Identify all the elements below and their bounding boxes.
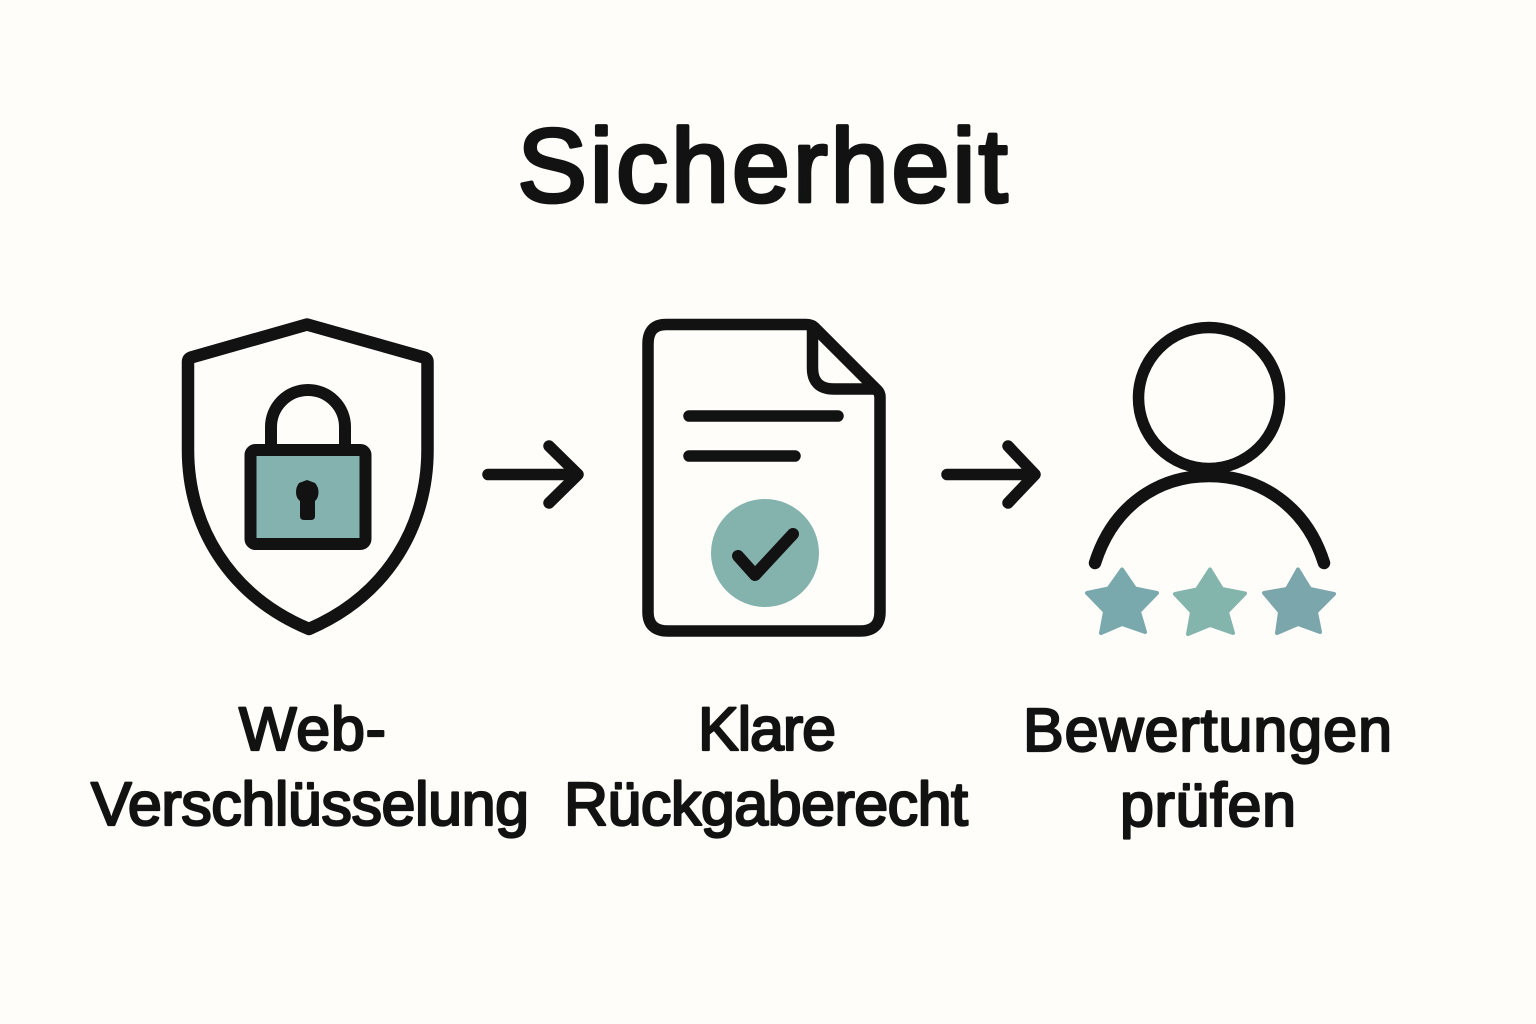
check mark [738, 534, 793, 575]
padlock shackle [271, 390, 345, 446]
panel: return policy [564, 324, 968, 838]
star 1 [1087, 570, 1157, 633]
padlock body [250, 450, 366, 544]
icon: person [1095, 328, 1324, 563]
icon: document [648, 324, 880, 631]
document folded corner [812, 326, 873, 389]
person head [1138, 328, 1280, 468]
label: Web-Verschlüsselung: Web- [239, 695, 386, 763]
arrow: shield to document [488, 446, 578, 503]
icon: shield [188, 324, 428, 629]
label: Klare Rückgaberecht: Rückgaberecht [564, 770, 968, 838]
person shoulders [1095, 476, 1324, 563]
document outline [648, 324, 880, 631]
panel: web encryption [91, 324, 529, 838]
label: Bewertungen prüfen: prüfen [1120, 771, 1296, 839]
document text lines [689, 416, 838, 456]
label: Web-Verschlüsselung [91, 695, 529, 838]
icon: padlock [250, 390, 366, 544]
star 2 [1175, 570, 1245, 634]
label: Klare Rückgaberecht [564, 695, 968, 838]
title: Sicherheit [518, 108, 1008, 224]
panel: reviews [1023, 328, 1392, 839]
star 3 [1264, 570, 1334, 633]
padlock keyhole [296, 480, 318, 520]
check badge [711, 499, 819, 607]
icon: rating stars [1087, 570, 1334, 634]
label: Klare Rückgaberecht: Klare [698, 695, 836, 763]
label: Web-Verschlüsselung: Verschlüsselung [91, 770, 529, 838]
arrow: document to reviews [947, 446, 1035, 503]
label: Bewertungen prüfen [1023, 696, 1392, 839]
label: Bewertungen prüfen: Bewertungen [1023, 696, 1392, 764]
